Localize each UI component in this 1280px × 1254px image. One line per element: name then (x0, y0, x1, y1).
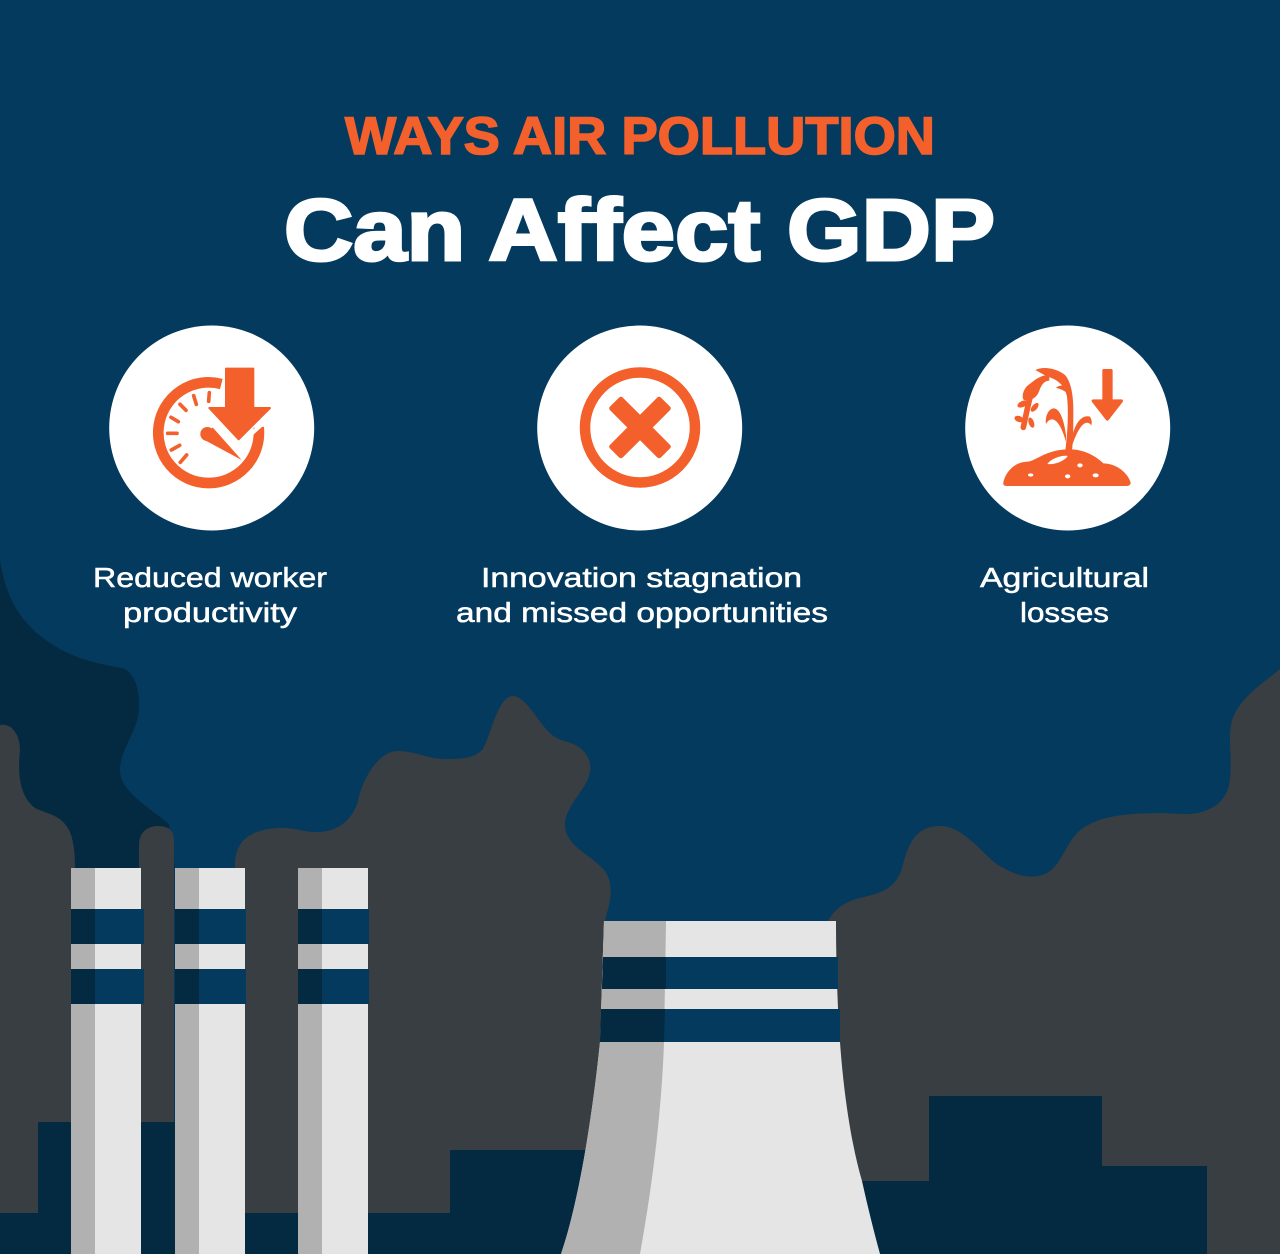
icon: wilting plant with down arrow (965, 326, 1170, 530)
chimney 1 (71, 868, 144, 1254)
label: Reduced worker (93, 562, 327, 593)
right dark buildings (830, 1096, 1207, 1254)
chimney 2 (175, 868, 246, 1254)
heading line 2: Can Affect GDP (284, 182, 995, 279)
scene: factory skyline with smoke (0, 560, 1280, 1254)
item: innovation stagnation (456, 326, 828, 628)
narrow grey smoke column (139, 826, 174, 1254)
left dark buildings (0, 1122, 610, 1254)
cooling tower (561, 921, 880, 1254)
item: reduced worker productivity (93, 326, 335, 628)
title (284, 107, 995, 279)
dark smoke plume (0, 560, 175, 868)
central grey smoke cloud (235, 696, 611, 1254)
chimney 3 (298, 868, 369, 1254)
heading line 1: WAYS AIR POLLUTION (345, 107, 935, 166)
item: agricultural losses (965, 326, 1170, 628)
icon: circled X (537, 326, 742, 530)
icon: speedometer with down arrow (109, 326, 314, 530)
label: and missed opportunities (456, 597, 828, 628)
label: Innovation stagnation (481, 562, 802, 593)
label: Agricultural (980, 562, 1149, 593)
right grey smoke cloud (828, 669, 1280, 1254)
left grey smoke (0, 725, 75, 1254)
label: losses (1020, 597, 1109, 628)
label: productivity (123, 597, 297, 628)
